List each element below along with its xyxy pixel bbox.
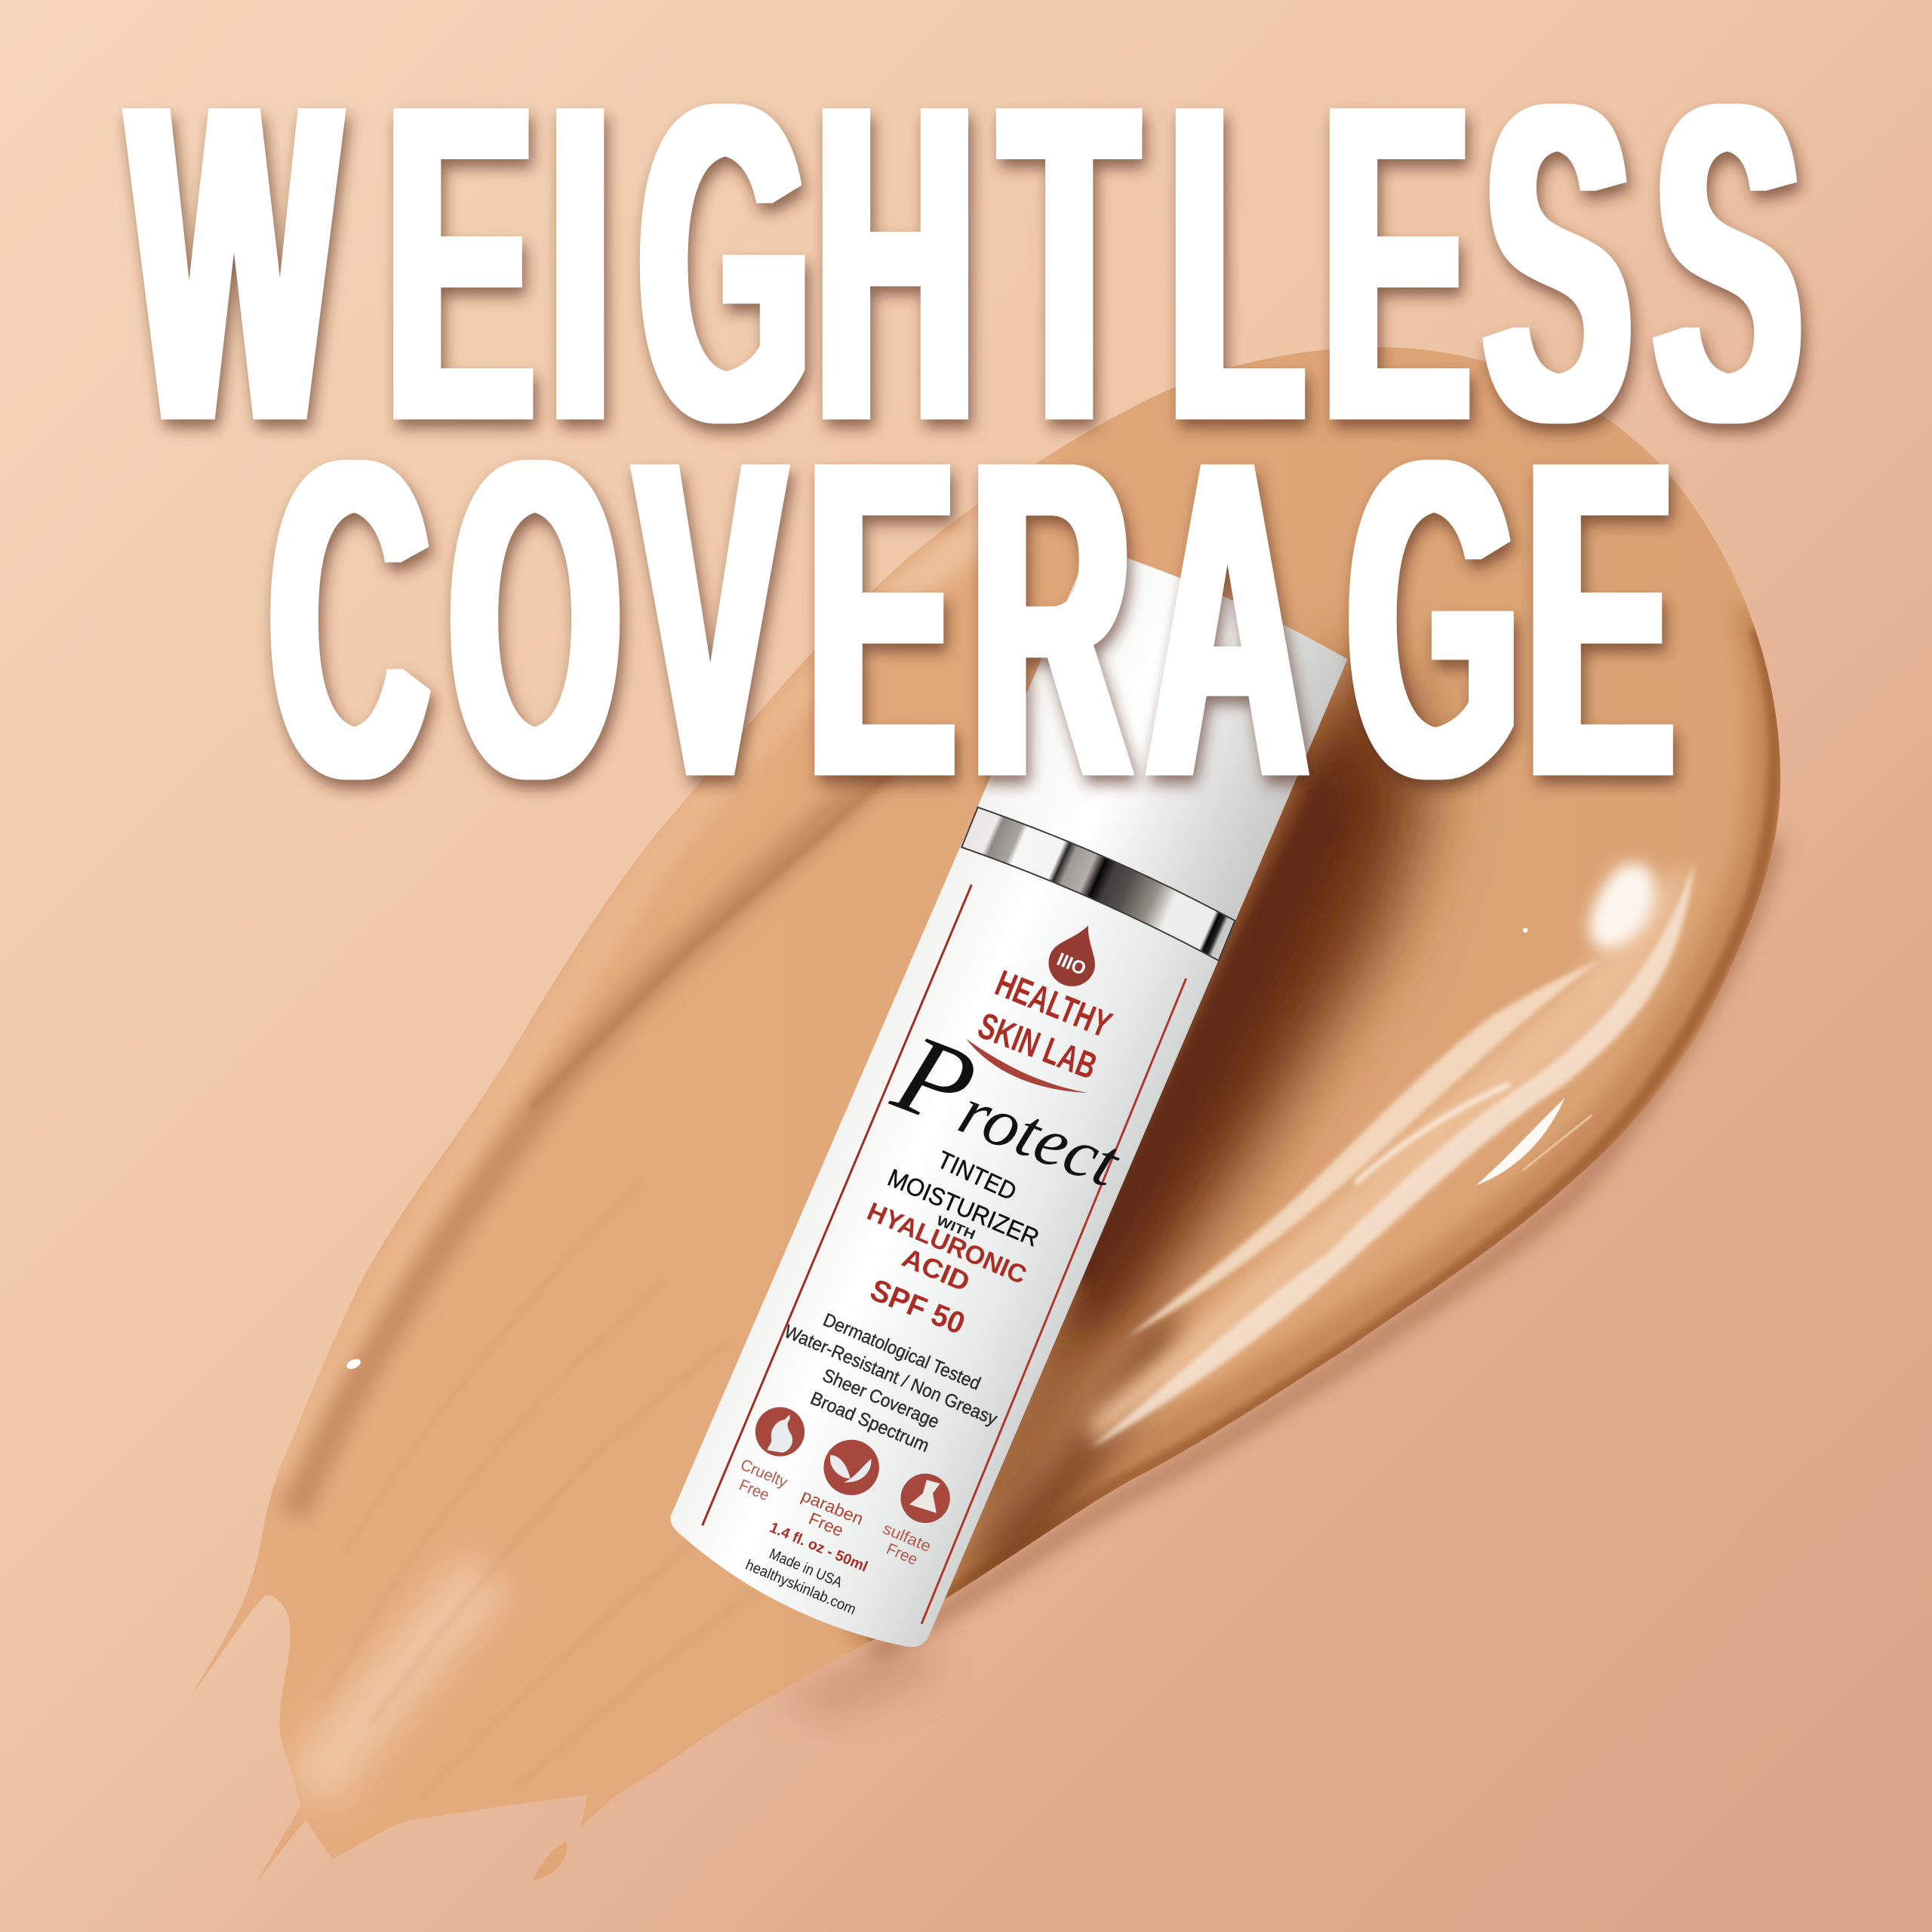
label rule left (697, 884, 977, 1525)
volume and footer (743, 1519, 870, 1618)
free-from labels: Cruelty (738, 1456, 790, 1491)
swatch shading (277, 468, 1775, 1799)
label artwork (695, 877, 1201, 1624)
product description: ACID (898, 1241, 974, 1297)
bottle body (650, 539, 1361, 1663)
cream speck (345, 1357, 362, 1371)
free-from labels: sulfate (880, 1520, 934, 1555)
brand: healthy skin lab: SKIN LAB (973, 1005, 1102, 1088)
shadow under swatch (777, 838, 1774, 1719)
free-from labels (737, 1456, 934, 1569)
claims list: Broad Spectrum (808, 1388, 932, 1457)
product description: WITH (934, 1213, 977, 1242)
logo drop (1041, 916, 1109, 994)
cream speck (1523, 928, 1527, 933)
volume and footer: Made in USA (767, 1546, 845, 1592)
title (130, 11, 1801, 871)
title line 1: WEIGHTLESS (130, 11, 1801, 515)
claims list: Dermatological Tested (820, 1310, 983, 1395)
free-from labels: Free (806, 1509, 847, 1540)
claims list: Sheer Coverage (820, 1365, 942, 1432)
product description: TINTED (934, 1145, 1021, 1206)
free-from labels: Free (884, 1540, 920, 1569)
swatch base (192, 347, 1780, 1884)
foundation cream swatch (192, 347, 1780, 1884)
volume and footer: 1.4 fl. oz - 50ml (768, 1519, 870, 1576)
product description (863, 1145, 1043, 1341)
product name: protect: Protect (879, 1010, 1145, 1211)
icon: sulfate free flask (900, 1474, 950, 1523)
product description: HYALURONIC (863, 1197, 1031, 1290)
cream droplet (532, 1842, 567, 1880)
claims list: Water-Resistant / Non Greasy (781, 1321, 1001, 1430)
product description: MOISTURIZER (884, 1163, 1043, 1252)
cap (975, 539, 1352, 921)
brand: healthy skin lab (973, 963, 1117, 1088)
free-from labels: paraben (798, 1485, 866, 1529)
swoosh (966, 1038, 1088, 1093)
gloss streaks (1091, 863, 1694, 1447)
title line 2: COVERAGE (269, 367, 1674, 871)
bottle casing (650, 539, 1361, 1663)
volume and footer: healthyskinlab.com (743, 1557, 858, 1618)
label rule right (910, 979, 1198, 1624)
icon: paraben free leaf (823, 1440, 879, 1495)
silver band (961, 802, 1238, 961)
free-from labels: Free (737, 1476, 771, 1504)
logo mark: IIIO (1054, 949, 1089, 980)
product bottle (650, 539, 1361, 1663)
product description: SPF 50 (866, 1272, 970, 1341)
icon: cruelty free (755, 1407, 804, 1457)
brand: healthy skin lab: HEALTHY (990, 963, 1117, 1046)
